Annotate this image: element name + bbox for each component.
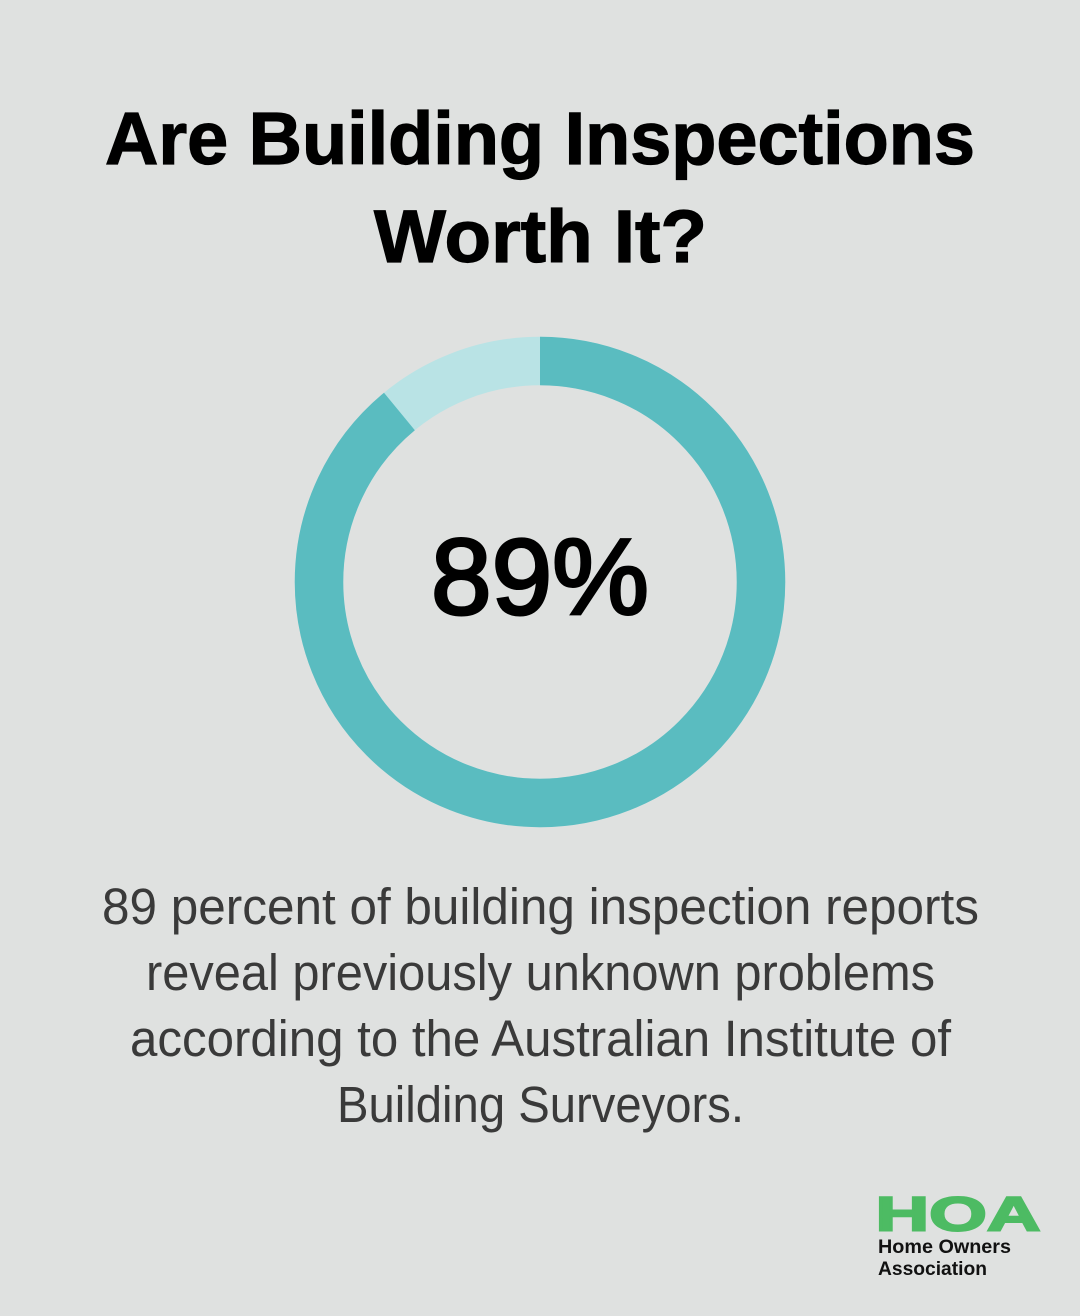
logo: HOA Home Owners Association [876,1188,1040,1280]
logo caption: Association [878,1259,987,1280]
donut track: remaining 11 percent [319,361,761,803]
title: Are Building Inspections [105,97,975,180]
donut chart: 89 percent [319,361,761,803]
description text: reveal previously unknown problems [146,944,935,1001]
description text: 89 percent of building inspection reports [102,878,979,935]
description text [102,878,979,1133]
donut arc: 89 percent [319,361,761,803]
logo wordmark: HOA [876,1188,1040,1242]
donut center value: 89% [431,516,649,637]
description text: Building Surveyors. [337,1076,744,1133]
logo caption [878,1237,1011,1280]
description text: according to the Australian Institute of [130,1010,952,1067]
logo caption: Home Owners [878,1237,1011,1258]
title [105,97,975,278]
title: Worth It? [374,195,707,278]
